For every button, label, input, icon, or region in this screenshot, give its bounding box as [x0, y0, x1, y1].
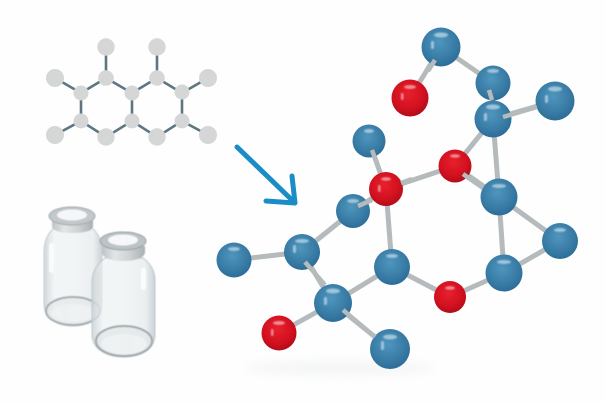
arrow [237, 147, 295, 203]
3D molecule model [216, 28, 578, 375]
vial: back [44, 207, 102, 326]
vial: front [92, 232, 155, 357]
atoms [216, 28, 578, 369]
bond stubs over atoms [305, 60, 537, 337]
soft ground shadow [245, 361, 435, 375]
flat molecule diagram [46, 38, 217, 146]
glass vials [44, 207, 155, 357]
specular highlights [228, 32, 566, 350]
bonds [234, 47, 560, 349]
